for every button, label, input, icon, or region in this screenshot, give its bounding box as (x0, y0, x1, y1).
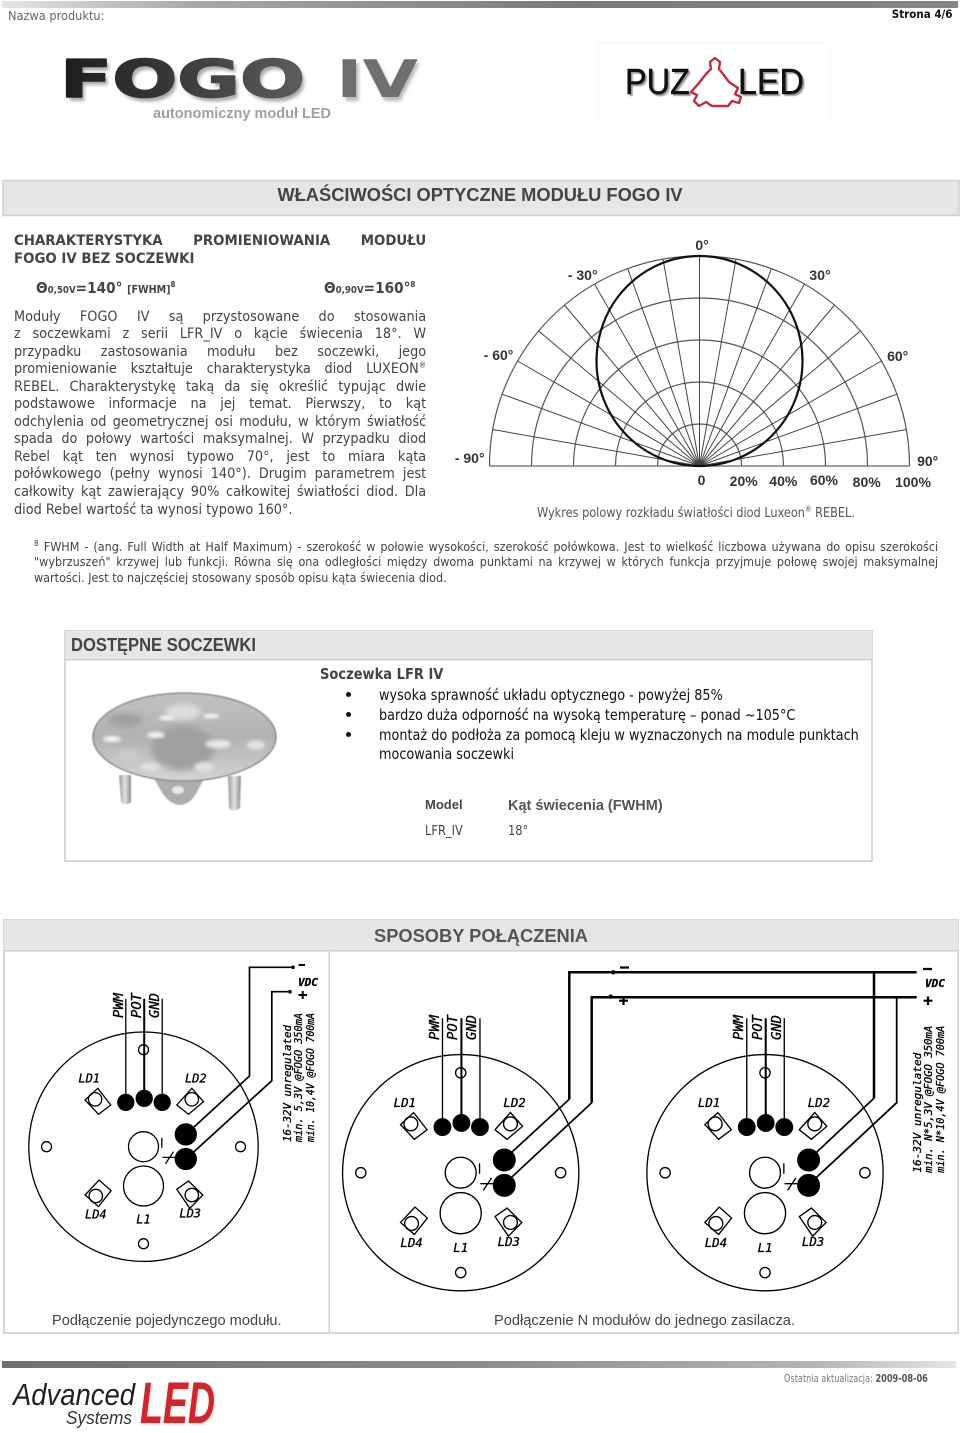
diagram: N modules, first module: LD3 (498, 1235, 520, 1249)
diagram: single module wiring: L1 (136, 1213, 151, 1227)
footnote: "wybrzuszeń" krzywej lub funkcji. Równa się ona odległości między dwoma punktami na krzywej w których funkcja przyjmuje połowę swojej maksymalnej (34, 555, 938, 569)
text block: optical description: Rebel kąt ten wynosi typowo 70°, jest to miara kąta (14, 449, 426, 465)
table: lens model and angle: LFR_IV (425, 824, 463, 839)
diagram: N modules, second module: min. N*10,4V @FOGO 700mA (935, 1026, 947, 1174)
bottom gradient bar (2, 1361, 956, 1368)
polar chart: 60° (887, 348, 908, 364)
table: lens model and angle (425, 797, 663, 839)
bullet list: lens features: montaż do podłoża za pomocą kleju w wyznaczonych na module punktach (379, 726, 859, 744)
diagram: N modules, first module: L1 (453, 1241, 468, 1255)
text block: optical description: odchylenia od geometrycznej osi modułu, w którym światłość (14, 414, 426, 430)
panel: lenses frame (65, 631, 872, 861)
polar chart: 0° (695, 237, 709, 253)
logo: PUZ LED (598, 43, 830, 120)
polar chart: 100% (895, 474, 931, 490)
header label: page number: Strona 4/6 (892, 7, 953, 21)
logo: PUZ LED: LED (738, 61, 804, 102)
polar chart: 90° (917, 453, 938, 469)
table: lens model and angle: Model (425, 797, 463, 812)
diagram: N modules, second module: min. N*5,3V @FOGO 350mA (923, 1026, 935, 1174)
text block: optical description: połówkowego (pełny wynosi 140°). Drugim parametrem jest (14, 466, 426, 482)
logo: PUZ LED: PUZ (625, 61, 690, 102)
logo: PUZ LED: LED (740, 63, 806, 104)
diagram: single module wiring: LD3 (179, 1207, 201, 1221)
diagram: N modules, first module: LD4 (400, 1236, 423, 1250)
text block: optical description: Moduły FOGO IV są przystosowane do stosowania (14, 308, 426, 324)
diagram: single module wiring: min. 10,4V @FOGO 700mA (305, 1013, 317, 1143)
logo: FOGO IV: FOGO (60, 50, 305, 110)
chart caption: Wykres polowy rozkładu światłości diod Luxeon® REBEL. (537, 504, 855, 520)
heading: optical properties: WŁAŚCIWOŚCI OPTYCZNE MODUŁU FOGO IV (277, 184, 683, 205)
diagram: single module wiring: PWM (112, 992, 127, 1018)
heading: radiation characteristic: FOGO IV BEZ SOCZEWKI (14, 251, 194, 267)
heading: lens name: Soczewka LFR IV (320, 665, 443, 683)
bullet list: lens features (346, 686, 859, 763)
text block: optical description: promieniowanie kształtuje charakterystyka diod LUXEON® (14, 360, 426, 377)
logo: FOGO IV: IV (339, 54, 420, 114)
panel: optical header band (3, 180, 959, 216)
polar chart (455, 237, 938, 490)
diagram: N modules, first module (343, 968, 917, 1291)
caption: single module: Podłączenie pojedynczego modułu. (52, 1313, 282, 1329)
footnote: wartości. Jest to najczęściej stosowany sposób opisu kąta świecenia diod. (34, 571, 447, 585)
logo: FOGO IV: FOGO (63, 54, 308, 114)
heading: radiation characteristic (14, 233, 426, 267)
polar chart: - 90° (455, 450, 485, 466)
heading: available lenses: DOSTĘPNE SOCZEWKI (71, 635, 256, 655)
footnote: 8 FWHM - (ang. Full Width at Half Maximum) - szerokość w połowie wysokości, szerokość połówkowa. Jest to wielkość liczbowa używana do opisu szerokości (34, 539, 938, 554)
logo: Advanced LED Systems: Advanced (11, 1377, 137, 1412)
subtitle: autonomous module: autonomiczny moduł LED (153, 106, 331, 122)
diagram: N modules, first module: PWM (428, 1014, 443, 1040)
diagram: N modules, first module: LD2 (503, 1096, 526, 1110)
polar chart: 80% (853, 474, 881, 490)
header label: product name: Nazwa produktu: (8, 8, 104, 23)
diagram: N modules, second module: 16-32V unregulated (912, 1052, 924, 1173)
bullet list: lens features: bardzo duża odporność na wysoką temperaturę – ponad ~105°C (379, 706, 795, 724)
diagram: N modules, second module: PWM (732, 1014, 747, 1040)
heading: radiation characteristic: CHARAKTERYSTYKA PROMIENIOWANIA MODUŁU (14, 233, 426, 249)
text block: optical description (14, 308, 426, 518)
diagram: N modules, second module: L1 (758, 1241, 772, 1255)
table: lens model and angle: Kąt świecenia (FWHM) (508, 798, 663, 814)
diagram: N modules, second module: POT (751, 1014, 766, 1040)
diagram: single module wiring: GND (148, 993, 163, 1018)
bullet list: lens features: wysoka sprawność układu optycznego - powyżej 85% (379, 686, 723, 704)
diagram: N modules, first module: POT (446, 1014, 461, 1040)
logo: Advanced LED Systems: Systems (66, 1408, 132, 1428)
polar chart: 0 (698, 472, 706, 488)
diagram: N modules, second module: LD1 (698, 1096, 720, 1110)
diagram: single module wiring: 16-32V unregulated (282, 1024, 294, 1142)
polar chart: 60% (810, 472, 839, 488)
bullet list: lens features: mocowania soczewki (379, 745, 514, 763)
polar chart: - 60° (484, 347, 513, 363)
text block: optical description: przypadku zastosowania modułu bez soczewki, jego (14, 344, 426, 360)
polar chart: 30° (809, 267, 831, 283)
diagram: single module wiring (29, 965, 318, 1261)
text block: optical description: podstawowe informacje na jej temat. Pierwszy, to kąt (14, 396, 426, 412)
heading: connection methods: SPOSOBY POŁĄCZENIA (374, 925, 588, 946)
diagram: single module wiring: VDC (298, 976, 318, 989)
panel: connections frame (4, 920, 958, 1333)
caption: N modules: Podłączenie N modułów do jednego zasilacza. (494, 1313, 795, 1329)
diagram: single module wiring: LD2 (185, 1072, 207, 1086)
text block: optical description: z soczewkami z serii LFR_IV o kącie świecenia 18°. W (14, 326, 426, 342)
diagram: N modules, second module (647, 969, 947, 1291)
diagram: N modules, second module: VDC (925, 977, 945, 990)
diagram: single module wiring: min. 5,3V @FOGO 350mA (293, 1013, 305, 1143)
logo: FOGO IV: IV (336, 50, 418, 110)
logo: FOGO IV (60, 50, 420, 114)
text block: optical description: REBEL. Charakterystykę taką da się określić typując dwie (14, 379, 426, 395)
footnote (34, 539, 938, 585)
diagram: N modules, second module: GND (770, 1015, 785, 1040)
image: lens (93, 693, 276, 810)
diagram: N modules, second module: LD2 (808, 1096, 830, 1110)
polar chart: - 30° (568, 267, 598, 283)
table: lens model and angle: 18° (508, 824, 528, 839)
diagram: N modules, second module: LD3 (802, 1235, 824, 1249)
formula: full angle: Θ0,90V=160°8 (324, 278, 415, 296)
logo: Advanced LED Systems (11, 1371, 216, 1433)
diagram: single module wiring: LD4 (85, 1208, 107, 1222)
top gradient bar (2, 1, 958, 8)
polar chart: 20% (730, 473, 758, 489)
text block: optical description: diod Rebel wartość ta wynosi typowo 160°. (14, 502, 292, 518)
text block: optical description: całkowity kąt zawierający 90% całkowitej światłości diod. Dla (14, 484, 426, 500)
formula: half-width angle: Θ0,50V=140° [FWHM]8 (36, 278, 176, 296)
text block: optical description: spada do połowy wartości maksymalnej. W przypadku diod (14, 431, 426, 447)
diagram: N modules, second module: LD4 (705, 1236, 727, 1250)
diagram: single module wiring: LD1 (78, 1072, 100, 1086)
logo: PUZ LED: PUZ (627, 63, 692, 104)
polar chart: 40% (769, 473, 798, 489)
footer: last update: Ostatnia aktualizacja: 2009-08-06 (784, 1373, 928, 1385)
diagram: N modules, first module: GND (465, 1015, 480, 1040)
diagram: single module wiring: POT (130, 992, 145, 1018)
diagram: N modules, first module: LD1 (394, 1096, 416, 1110)
